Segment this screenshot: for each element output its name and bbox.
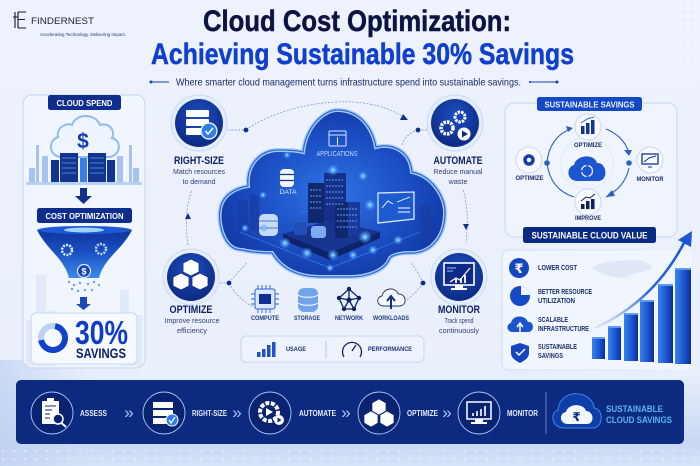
- step: automate: waste: [448, 177, 468, 186]
- benefit: better resource utilization: UTILIZATION: [538, 298, 575, 305]
- chevrons: »: [232, 403, 242, 422]
- pill: sustainable cloud value: SUSTAINABLE CLOUD VALUE: [532, 230, 648, 242]
- sustainable cloud savings badge: ₹: [572, 410, 581, 424]
- step: right-size: [171, 95, 227, 186]
- step: automate: [249, 392, 337, 434]
- pill: sustainable cloud value: [523, 227, 656, 243]
- applications icon and label: APPLICATIONS: [316, 149, 358, 158]
- cycle centre cloud: [568, 156, 605, 181]
- connector nodes: [185, 114, 469, 285]
- benefit: scalable infrastructure: INFRASTRUCTURE: [538, 326, 589, 333]
- sustainable cloud savings badge: CLOUD SAVINGS: [606, 415, 672, 426]
- cycle node: improve: IMPROVE: [575, 215, 602, 222]
- logo: Findernest: FINDERNEST: [31, 16, 94, 27]
- step: automate: Reduce manual: [434, 167, 483, 176]
- step: assess: [31, 392, 108, 434]
- step: monitor: MONITOR: [438, 304, 480, 316]
- logo: Findernest: [13, 12, 126, 37]
- cycle node: improve: [575, 189, 602, 222]
- step: optimize: Improve resource: [164, 316, 220, 325]
- icon: usage bars: [257, 342, 276, 357]
- cycle node: optimize left: OPTIMIZE: [516, 175, 544, 182]
- cycle node: optimize top: [574, 114, 603, 149]
- data icon and label: DATA: [279, 189, 297, 196]
- step: optimize: OPTIMIZE: [170, 304, 212, 316]
- card: 30% savings: 30%: [75, 314, 128, 351]
- resource: workloads: [373, 289, 409, 322]
- dashboard monitor: [378, 192, 414, 223]
- step: monitor: [458, 392, 538, 434]
- title: [151, 5, 574, 71]
- cycle node: monitor: MONITOR: [636, 176, 664, 183]
- step: right-size: RIGHT-SIZE: [174, 155, 224, 167]
- resource: network: NETWORK: [335, 315, 363, 322]
- step: right-size: to demand: [182, 177, 216, 186]
- step: right-size: Match resources: [173, 167, 225, 176]
- logo: Findernest: Accelerating Technology. Delivering Impact.: [40, 32, 126, 37]
- step: monitor: [431, 249, 487, 335]
- subtitle: Where smarter cloud management turns infrastructure spend into sustainable savings.: [176, 76, 521, 88]
- icon: cubes: [163, 249, 219, 305]
- panel: usage and performance: USAGE: [286, 346, 306, 353]
- platform and servers: [240, 172, 420, 268]
- benefit: sustainable savings: SUSTAINABLE: [538, 344, 577, 351]
- pill: cloud spend: [48, 95, 121, 110]
- connector arrows around the cloud: [186, 102, 467, 307]
- benefit: lower cost: LOWER COST: [538, 265, 578, 272]
- data icon and label: [279, 169, 297, 196]
- cycle arrows: [547, 129, 629, 197]
- step: optimize: efficiency: [177, 326, 207, 335]
- step: optimize: [358, 392, 439, 434]
- central cloud illustration: [220, 110, 445, 277]
- cycle node: optimize top: OPTIMIZE: [574, 142, 603, 149]
- cycle node: monitor: [636, 147, 664, 183]
- step: right-size: RIGHT-SIZE: [192, 409, 228, 418]
- sustainable cloud savings badge: [553, 394, 672, 428]
- step: monitor: Track spend: [444, 316, 474, 325]
- panel: sustainable cloud value list: [502, 231, 692, 370]
- panel: cloud spend: [23, 95, 145, 368]
- illustration: funnel: [37, 226, 132, 292]
- process banner: [16, 380, 684, 444]
- benefit: sustainable savings: [511, 343, 577, 363]
- panel: sustainable savings: [505, 97, 677, 237]
- icon: monitor with chart: [431, 249, 487, 305]
- illustration: cloud and data centre skyline: [26, 116, 142, 185]
- bar chart: rising savings: [592, 268, 691, 364]
- step: assess: ASSESS: [80, 409, 108, 418]
- resource: network: [335, 287, 363, 322]
- faint world map: [592, 259, 652, 278]
- illustration: funnel: $: [81, 266, 87, 276]
- background skyline: [238, 195, 431, 237]
- arrow: [75, 188, 92, 204]
- card: 30% savings: SAVINGS: [76, 345, 126, 361]
- panel: usage and performance: PERFORMANCE: [368, 346, 412, 353]
- icon: gauge: [343, 342, 362, 357]
- resource: storage: STORAGE: [294, 315, 320, 322]
- illustration: cloud and data centre skyline: $: [77, 130, 89, 153]
- chevrons: »: [442, 403, 452, 422]
- step: optimize: OPTIMIZE: [407, 409, 439, 418]
- benefit: sustainable savings: SAVINGS: [538, 353, 563, 360]
- arrow: [76, 297, 91, 310]
- applications icon and label: [316, 131, 358, 158]
- resource: storage: [294, 288, 320, 322]
- benefit: better resource utilization: [510, 286, 592, 306]
- title: Achieving Sustainable 30% Savings: [151, 38, 574, 71]
- benefit: scalable infrastructure: SCALABLE: [538, 317, 568, 324]
- glow nodes: [241, 151, 403, 272]
- pill: sustainable savings: [537, 97, 642, 111]
- benefit: lower cost: ₹: [514, 262, 524, 277]
- benefit: lower cost: [509, 258, 578, 278]
- icon: server with check: [171, 95, 227, 151]
- pill: cloud spend: CLOUD SPEND: [56, 98, 112, 108]
- benefit: better resource utilization: BETTER RESOURCE: [538, 289, 592, 296]
- step: right-size: [143, 392, 228, 434]
- step: optimize: [163, 249, 220, 335]
- chevrons: »: [341, 403, 351, 422]
- title: Cloud Cost Optimization:: [203, 5, 511, 38]
- resource: workloads: WORKLOADS: [373, 315, 409, 322]
- growth arrow: [595, 231, 692, 328]
- step: automate: AUTOMATE: [299, 409, 337, 418]
- donut chart: [39, 324, 67, 352]
- cycle node: optimize left: [516, 147, 544, 182]
- chevrons: »: [124, 403, 134, 422]
- step: monitor: continuously: [439, 326, 479, 335]
- panel: usage and performance: [241, 336, 424, 362]
- step: automate: [427, 95, 483, 186]
- icon: gears and play: [427, 95, 483, 151]
- sustainable cloud savings badge: SUSTAINABLE: [606, 404, 663, 415]
- pill: cost optimization: COST OPTIMIZATION: [46, 211, 124, 221]
- step: automate: AUTOMATE: [434, 155, 482, 167]
- resource: compute: COMPUTE: [251, 315, 279, 322]
- pill: sustainable savings: SUSTAINABLE SAVINGS: [544, 100, 635, 110]
- resource: compute: [251, 285, 279, 322]
- benefit: scalable infrastructure: [507, 316, 589, 333]
- card: 30% savings: [31, 313, 137, 364]
- step: monitor: MONITOR: [507, 409, 538, 418]
- pill: cost optimization: [37, 208, 132, 223]
